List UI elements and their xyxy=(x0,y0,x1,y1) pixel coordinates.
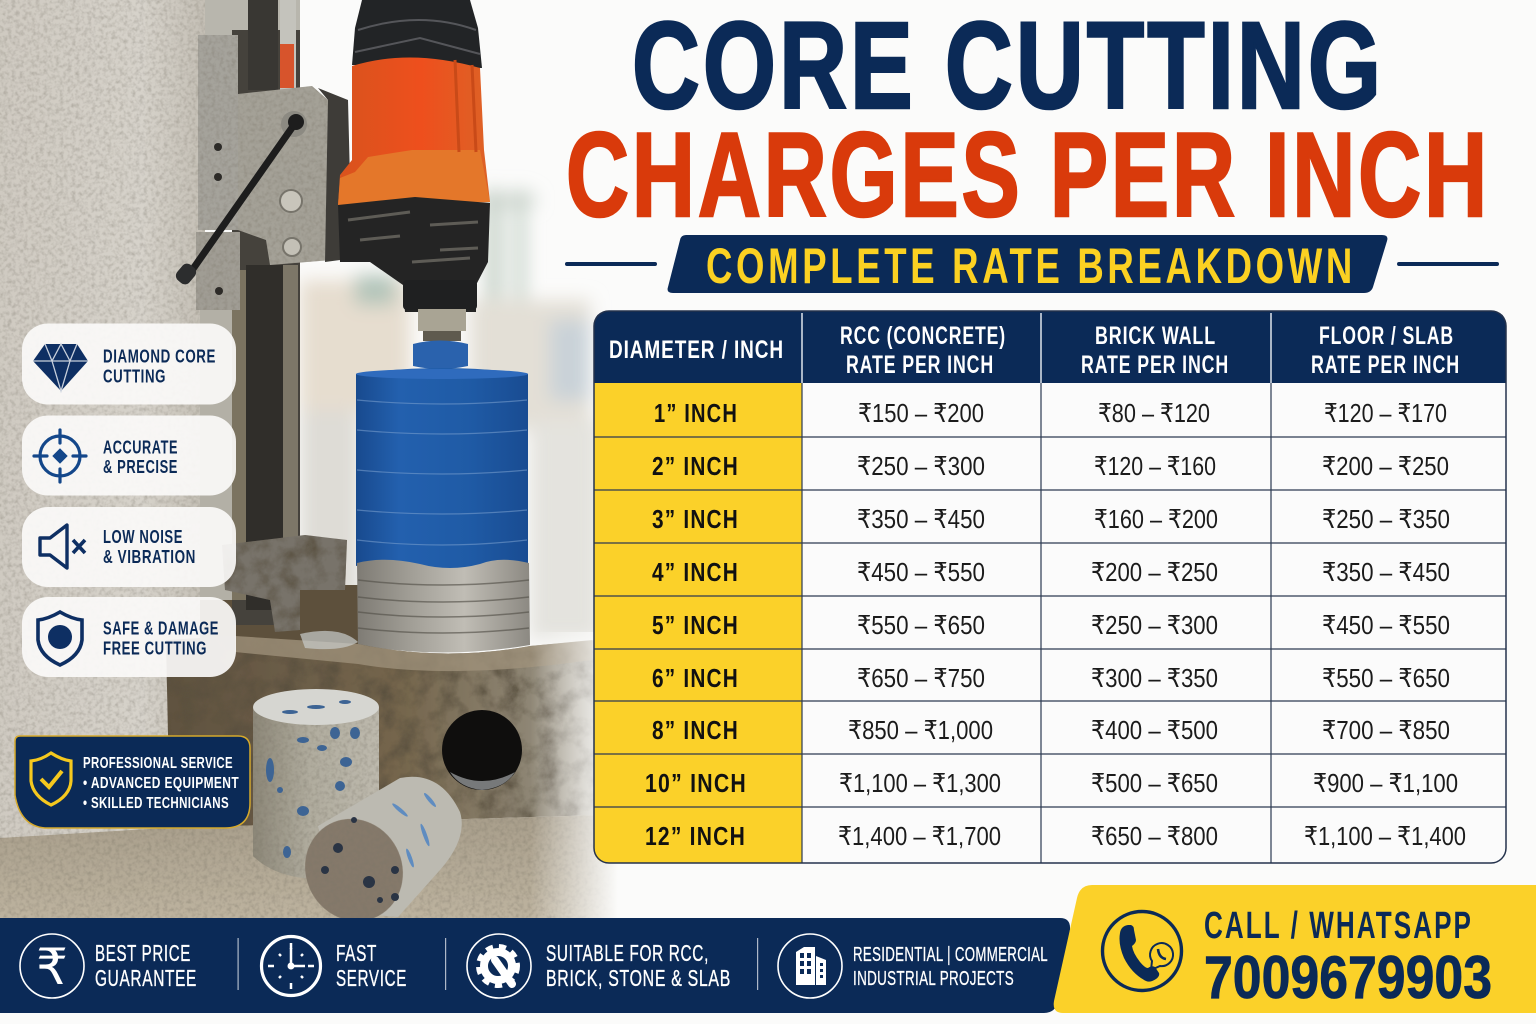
table header: FLOOR / SLAB xyxy=(1319,322,1454,350)
row 2 inch: ₹120 – ₹160 xyxy=(1094,451,1216,481)
feature pill: diamond core cutting: DIAMOND CORE xyxy=(103,346,216,366)
row 2 inch xyxy=(652,451,1449,481)
benefit: project types xyxy=(778,934,1048,998)
table header: RATE PER INCH xyxy=(1081,351,1229,379)
table header: RATE PER INCH xyxy=(846,351,994,379)
row 1 inch xyxy=(654,398,1447,428)
row 3 inch: ₹160 – ₹200 xyxy=(1094,504,1218,534)
core drill barrel blue section xyxy=(356,368,528,570)
shadowed ledge behind clamp xyxy=(200,585,360,655)
benefit: suitable materials: BRICK, STONE & SLAB xyxy=(546,965,731,991)
call to action panel xyxy=(1054,885,1536,1013)
icon: clock xyxy=(262,936,320,996)
row 4 inch xyxy=(652,557,1450,587)
benefit: fast service: FAST xyxy=(336,940,377,966)
carriage clamp at base of rack xyxy=(222,535,347,632)
table header: BRICK WALL xyxy=(1095,322,1216,350)
blurred construction site background xyxy=(300,190,600,640)
row 10 inch: ₹900 – ₹1,100 xyxy=(1313,768,1458,798)
drill gearbox xyxy=(338,197,490,312)
table header xyxy=(594,311,1506,383)
row 10 inch: ₹1,100 – ₹1,300 xyxy=(839,768,1001,798)
row 8 inch: ₹700 – ₹850 xyxy=(1322,715,1450,745)
table header: DIAMETER / INCH xyxy=(609,336,784,364)
concrete block xyxy=(166,631,600,828)
row 5 inch: ₹550 – ₹650 xyxy=(857,610,985,640)
row 2 inch: ₹250 – ₹300 xyxy=(857,451,985,481)
row 12 inch: ₹1,400 – ₹1,700 xyxy=(838,821,1001,851)
row 2 inch: 2” INCH xyxy=(652,451,739,481)
spindle collar xyxy=(418,309,466,331)
professional service badge xyxy=(15,736,250,828)
icon: buildings xyxy=(796,947,826,985)
row 3 inch: 3” INCH xyxy=(652,504,739,534)
row 3 inch: ₹350 – ₹450 xyxy=(857,504,985,534)
feed handle xyxy=(173,114,304,287)
feature pill: low noise and vibration: LOW NOISE xyxy=(103,527,183,547)
row 6 inch: ₹550 – ₹650 xyxy=(1322,663,1450,693)
row 6 inch: 6” INCH xyxy=(652,663,739,693)
table header: RCC (CONCRETE) xyxy=(840,322,1006,350)
rate table xyxy=(594,311,1506,863)
icon: gold shield check xyxy=(31,753,71,805)
row 1 inch: ₹120 – ₹170 xyxy=(1324,398,1447,428)
feature pill: low noise and vibration: & VIBRATION xyxy=(103,547,196,567)
bottom benefits bar xyxy=(0,918,1070,1013)
row 3 inch: ₹250 – ₹350 xyxy=(1322,504,1450,534)
feature pill: accurate and precise: ACCURATE xyxy=(103,438,178,458)
benefit: project types: RESIDENTIAL | COMMERCIAL xyxy=(853,944,1048,966)
row 12 inch: 12” INCH xyxy=(645,821,746,851)
row 8 inch: ₹850 – ₹1,000 xyxy=(848,715,993,745)
icon: shield xyxy=(38,612,82,665)
benefit: best price guarantee xyxy=(20,934,197,998)
standing cylindrical core sample xyxy=(253,689,379,879)
row 12 inch: ₹1,100 – ₹1,400 xyxy=(1304,821,1466,851)
row 12 inch: ₹650 – ₹800 xyxy=(1091,821,1218,851)
professional service badge: • SKILLED TECHNICIANS xyxy=(83,795,229,812)
row 4 inch: ₹450 – ₹550 xyxy=(857,557,985,587)
core drill barrel worn silver section xyxy=(357,560,530,652)
fade to white on right of photo xyxy=(530,632,642,918)
blue barrel collar xyxy=(413,340,468,369)
row 10 inch: 10” INCH xyxy=(645,768,747,798)
row 5 inch: 5” INCH xyxy=(652,610,739,640)
professional service badge: PROFESSIONAL SERVICE xyxy=(83,755,233,772)
photo: core drilling machine on concrete block xyxy=(0,0,642,938)
row 1 inch: 1” INCH xyxy=(654,398,738,428)
row 5 inch: ₹450 – ₹550 xyxy=(1322,610,1450,640)
benefit: best price guarantee: GUARANTEE xyxy=(95,965,197,991)
icon: gear and wrench xyxy=(479,947,517,985)
icon: target xyxy=(34,430,86,482)
row 6 inch xyxy=(652,663,1450,693)
benefit: suitable materials xyxy=(467,934,731,998)
row 1 inch: ₹80 – ₹120 xyxy=(1098,398,1210,428)
drill orange motor housing xyxy=(338,57,490,205)
first column yellow background xyxy=(594,383,802,863)
row 12 inch xyxy=(645,821,1466,851)
feature pill: safe and damage free: SAFE & DAMAGE xyxy=(103,618,219,638)
benefit: best price guarantee: ₹ xyxy=(36,938,68,996)
professional service badge: • ADVANCED EQUIPMENT xyxy=(83,775,239,792)
feature pill: low noise and vibration xyxy=(22,507,236,587)
row 4 inch: ₹350 – ₹450 xyxy=(1322,557,1450,587)
row 6 inch: ₹300 – ₹350 xyxy=(1091,663,1218,693)
benefit: best price guarantee: BEST PRICE xyxy=(95,940,191,966)
icon: diamond xyxy=(33,344,88,391)
row 8 inch: 8” INCH xyxy=(652,715,739,745)
icon: muted speaker xyxy=(40,525,85,568)
row 10 inch xyxy=(645,768,1458,798)
row 4 inch: ₹200 – ₹250 xyxy=(1091,557,1218,587)
benefit: suitable materials: SUITABLE FOR RCC, xyxy=(546,940,709,966)
feature pill: safe and damage free: FREE CUTTING xyxy=(103,638,207,658)
call to action panel: 7009679903 xyxy=(1204,944,1492,1011)
concrete wall xyxy=(0,0,205,840)
drilled hole xyxy=(442,710,522,790)
drill black top cap xyxy=(352,0,482,68)
benefit: fast service: SERVICE xyxy=(336,965,407,991)
feature pill: safe and damage free xyxy=(22,597,236,677)
row 5 inch xyxy=(652,610,1450,640)
row 4 inch: 4” INCH xyxy=(652,557,739,587)
row 8 inch: ₹400 – ₹500 xyxy=(1091,715,1218,745)
row 10 inch: ₹500 – ₹650 xyxy=(1091,768,1218,798)
feature pill: accurate and precise xyxy=(22,416,236,496)
row 8 inch xyxy=(652,715,1450,745)
feature pill: accurate and precise: & PRECISE xyxy=(103,457,178,477)
fallen cylindrical core sample xyxy=(287,777,462,938)
row 1 inch: ₹150 – ₹200 xyxy=(858,398,984,428)
row 5 inch: ₹250 – ₹300 xyxy=(1091,610,1218,640)
row 6 inch: ₹650 – ₹750 xyxy=(857,663,985,693)
table header: RATE PER INCH xyxy=(1311,351,1460,379)
benefit: project types: INDUSTRIAL PROJECTS xyxy=(853,968,1014,990)
row 3 inch xyxy=(652,504,1450,534)
feature pill: diamond core cutting: CUTTING xyxy=(103,366,166,386)
icon: phone and whatsapp xyxy=(1102,912,1182,990)
rack and column xyxy=(196,0,300,625)
feature pill: diamond core cutting xyxy=(22,324,236,404)
benefit: fast service xyxy=(262,936,407,996)
wet concrete ground xyxy=(0,815,640,918)
row 2 inch: ₹200 – ₹250 xyxy=(1322,451,1449,481)
feed carriage plate xyxy=(238,86,332,265)
